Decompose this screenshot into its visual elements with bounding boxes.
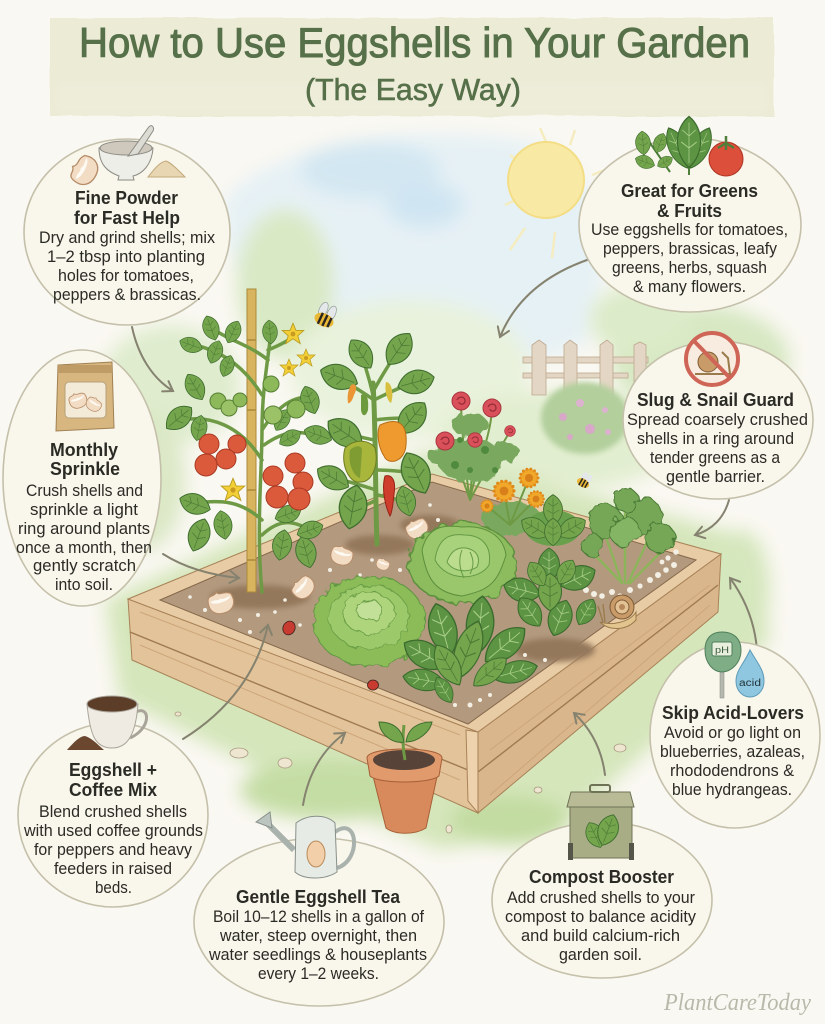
body text: Dry and grind shells; mix xyxy=(39,228,215,247)
body text: holes for tomatoes, xyxy=(58,266,194,285)
body text: Spread coarsely crushed xyxy=(627,410,808,429)
heading: Monthly xyxy=(50,439,119,460)
body text: sprinkle a light xyxy=(30,500,138,519)
body text: water seedlings & houseplants xyxy=(208,945,427,964)
raised garden bed xyxy=(128,474,721,813)
heading: Sprinkle xyxy=(50,458,120,479)
icon: acid drop: acid xyxy=(739,678,761,689)
shells on grass xyxy=(175,712,626,833)
heading: Skip Acid-Lovers xyxy=(662,702,804,723)
body text xyxy=(627,410,808,486)
icon: tomato xyxy=(709,136,743,176)
ladybugs xyxy=(281,619,378,690)
watermark: PlantCareToday xyxy=(663,990,811,1016)
icon: herb sprig xyxy=(633,131,675,172)
body text: every 1–2 weeks. xyxy=(258,964,379,983)
bed right face xyxy=(478,554,721,813)
arrow: acid xyxy=(730,578,757,650)
body text: ring around plants xyxy=(18,519,150,538)
body text: blueberries, azaleas, xyxy=(660,742,805,761)
panel: skip acid-lovers xyxy=(650,632,820,828)
bed rim xyxy=(128,474,721,732)
heading: Slug & Snail Guard xyxy=(637,389,794,410)
plant pot with seedling xyxy=(367,722,442,833)
heading: Gentle Eggshell Tea xyxy=(236,886,401,907)
rose bush xyxy=(428,392,519,500)
bamboo stake xyxy=(247,289,256,592)
flowering shrub xyxy=(541,382,629,454)
icon: acid drop xyxy=(736,650,764,697)
tomato plant xyxy=(160,313,335,592)
arrow: fine powder xyxy=(132,327,173,391)
body text: 1–2 tbsp into planting xyxy=(47,247,205,266)
body text: Add crushed shells to your xyxy=(507,888,695,907)
icon: eggshell bag xyxy=(56,362,114,431)
body text: peppers & brassicas. xyxy=(53,285,201,304)
small herb xyxy=(517,495,590,546)
arrow: slug xyxy=(695,500,729,535)
shell pebbles xyxy=(188,503,679,708)
heading xyxy=(50,439,120,479)
body text: for peppers and heavy xyxy=(34,840,192,859)
body text xyxy=(208,907,427,983)
body text xyxy=(660,723,805,799)
bed left face xyxy=(128,599,478,813)
body text: compost to balance acidity xyxy=(505,907,696,926)
icon: pH meter: pH xyxy=(715,645,729,655)
body text: feeders in raised xyxy=(54,859,172,878)
heading xyxy=(74,187,180,228)
arrow: coffee xyxy=(183,625,268,739)
icon: pH meter xyxy=(705,632,741,698)
heading: & Fruits xyxy=(657,200,722,221)
bee xyxy=(312,300,340,330)
snail xyxy=(598,595,636,628)
icon: coffee grounds pile xyxy=(67,736,104,750)
body text: and build calcium-rich xyxy=(521,926,680,945)
heading: for Fast Help xyxy=(74,207,180,228)
body text: with used coffee grounds xyxy=(23,821,203,840)
heading: Fine Powder xyxy=(75,187,178,208)
title banner xyxy=(50,18,774,116)
panel: eggshell coffee mix xyxy=(18,696,208,907)
body text: into soil. xyxy=(55,575,113,594)
heading: Great for Greens xyxy=(621,180,758,201)
icon: mortar and pestle xyxy=(99,126,154,180)
heading: Coffee Mix xyxy=(69,779,158,800)
body text xyxy=(16,481,152,594)
subtitle: (The Easy Way) xyxy=(305,72,521,107)
frilly lettuce xyxy=(313,576,425,666)
parsley xyxy=(581,488,675,583)
icon: watering can xyxy=(256,812,354,878)
body text: Avoid or go light on xyxy=(664,723,801,742)
panel: compost booster xyxy=(492,785,712,978)
body text xyxy=(39,228,215,304)
spinach xyxy=(398,595,540,706)
icon: spinach leaf xyxy=(661,116,717,175)
heading xyxy=(621,180,758,221)
butterhead lettuce xyxy=(408,523,516,603)
body text: greens, herbs, squash xyxy=(612,258,767,277)
panel: monthly sprinkle xyxy=(3,350,161,606)
body text: beds. xyxy=(95,878,132,897)
body text: shells in a ring around xyxy=(637,429,794,448)
fence xyxy=(523,340,648,395)
heading: Eggshell + xyxy=(69,759,157,780)
body text xyxy=(505,888,696,964)
body text: peppers, brassicas, leafy xyxy=(603,239,777,258)
body text: tender greens as a xyxy=(650,448,780,467)
panel: greens and fruits xyxy=(579,116,801,312)
body text: once a month, then xyxy=(16,538,152,557)
body text: Use eggshells for tomatoes, xyxy=(591,220,788,239)
basil xyxy=(501,548,601,640)
icon: eggshell xyxy=(67,152,102,189)
icon: coffee cup xyxy=(87,696,147,748)
arrow: monthly xyxy=(163,554,239,578)
title: How to Use Eggshells in Your Garden xyxy=(79,19,750,66)
arrow: tea xyxy=(303,733,345,805)
body text: garden soil. xyxy=(559,945,642,964)
background foliage xyxy=(100,210,790,550)
body text xyxy=(23,802,203,897)
body text: Boil 10–12 shells in a gallon of xyxy=(213,907,424,926)
arrows xyxy=(132,260,757,805)
arrow: greens xyxy=(500,260,587,337)
panel: slug and snail guard xyxy=(623,333,813,499)
icon: compost bin xyxy=(567,785,634,860)
panel: gentle eggshell tea xyxy=(194,812,444,1006)
body text: & many flowers. xyxy=(633,277,746,296)
body text: blue hydrangeas. xyxy=(672,780,792,799)
sun xyxy=(505,128,605,258)
body text xyxy=(591,220,788,296)
bee small xyxy=(575,470,594,490)
body text: rhododendrons & xyxy=(670,761,795,780)
sky wash xyxy=(224,134,603,366)
body text: gentle barrier. xyxy=(666,467,765,486)
body text: gently scratch xyxy=(33,556,136,575)
arrow: compost xyxy=(574,713,605,775)
grass wash xyxy=(105,450,770,850)
heading: Compost Booster xyxy=(529,866,674,887)
soil xyxy=(160,482,696,724)
body text: Blend crushed shells xyxy=(39,802,187,821)
panel: fine powder xyxy=(24,126,230,325)
heading xyxy=(69,759,158,800)
body text: water, steep overnight, then xyxy=(219,926,417,945)
icon: no snail sign xyxy=(686,333,738,385)
icon: powder pile xyxy=(148,161,185,177)
eggshells in soil xyxy=(206,515,432,616)
marigolds xyxy=(481,469,544,535)
pepper plant xyxy=(312,327,438,544)
body text: Crush shells and xyxy=(26,481,143,500)
